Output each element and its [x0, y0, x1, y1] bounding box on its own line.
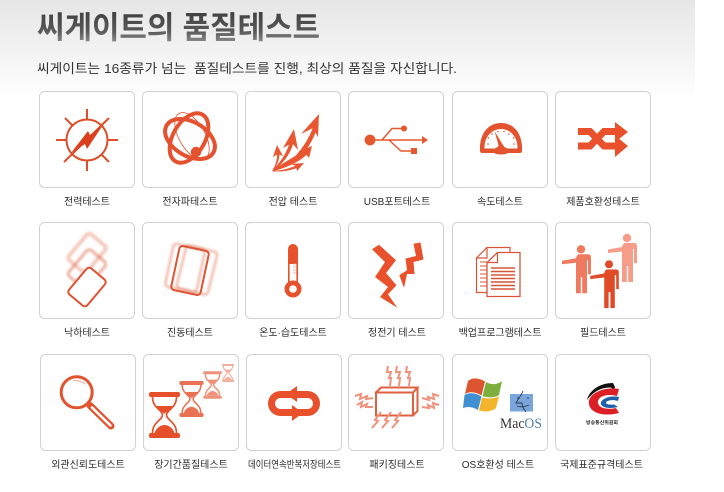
- panel: drop test: [40, 222, 134, 339]
- label: 속도테스트: [477, 196, 523, 208]
- icon: magnifying glass: [61, 377, 111, 426]
- icon: speedometer gauge: [480, 123, 522, 154]
- label: 낙하테스트: [64, 326, 110, 339]
- panel: appearance reliability test: [40, 354, 136, 471]
- label: 진동테스트: [167, 327, 213, 339]
- panel: electromagnetic test: [142, 92, 238, 208]
- label: 필드테스트: [580, 327, 626, 339]
- panel: compatibility test: [556, 92, 650, 208]
- label: 온도·습도테스트: [259, 327, 327, 339]
- label: 백업프로그램테스트: [459, 326, 541, 339]
- icon: hourglasses: [149, 364, 234, 438]
- label: 패키징테스트: [369, 459, 425, 471]
- header background: [0, 0, 695, 100]
- label: 정전기 테스트: [368, 327, 426, 339]
- panel: data continuous write test: [246, 354, 342, 471]
- panel: long-term quality test: [144, 354, 238, 471]
- panel: temperature humidity test: [246, 222, 340, 339]
- label: OS호환성 테스트: [462, 459, 534, 471]
- icon: vibrating card: [165, 243, 218, 296]
- panel: OS compatibility test: [452, 354, 548, 471]
- panel: USB port test: [348, 92, 444, 208]
- subtitle: 씨게이트는 16종류가 넘는 품질테스트를 진행, 최상의 품질을 자신합니다.: [37, 61, 457, 76]
- icon: Windows logo: [463, 378, 502, 411]
- panel: power test: [40, 92, 134, 208]
- label: 전압 테스트: [269, 195, 317, 208]
- icon: documents: [476, 248, 520, 296]
- label: 데이터연속반복저장테스트: [248, 459, 341, 471]
- panel: packaging test: [348, 354, 444, 471]
- panel: voltage test: [246, 92, 340, 208]
- label: 장기간품질테스트: [154, 459, 228, 471]
- label: 전자파테스트: [162, 196, 218, 208]
- icon: broadcasting commission logo: 방송통신위원회: [586, 419, 618, 426]
- panel: backup program test: [452, 222, 548, 339]
- title: 씨게이트의 품질테스트: [37, 10, 320, 46]
- label: 제품호환성테스트: [566, 196, 640, 208]
- label: USB포트테스트: [364, 196, 430, 208]
- panel: static electricity test: [348, 222, 444, 339]
- label: 국제표준규격테스트: [560, 458, 643, 471]
- icon: loop arrows: [272, 386, 316, 421]
- icon: rising arrows: [273, 114, 319, 171]
- label: 전력테스트: [64, 196, 110, 208]
- panel: field test: [556, 222, 650, 339]
- icon: three people: [562, 234, 637, 308]
- icon: USB symbol: [365, 126, 428, 154]
- label: 외관신뢰도테스트: [51, 459, 125, 471]
- icon: lightning bolts: [372, 242, 424, 308]
- icon: atom: [158, 107, 222, 169]
- icon: Mac OS logo: MacOS: [500, 416, 542, 432]
- icon: shuffle arrows: [578, 122, 628, 157]
- panel: international standard test: [556, 354, 650, 471]
- icon: falling card: [67, 232, 107, 308]
- icon: box with heat arrows: [355, 366, 439, 428]
- icon: sun with lightning bolt: [56, 109, 118, 171]
- panel: speed test: [452, 92, 548, 208]
- panel: vibration test: [142, 222, 238, 339]
- icon: thermometer: [284, 244, 302, 298]
